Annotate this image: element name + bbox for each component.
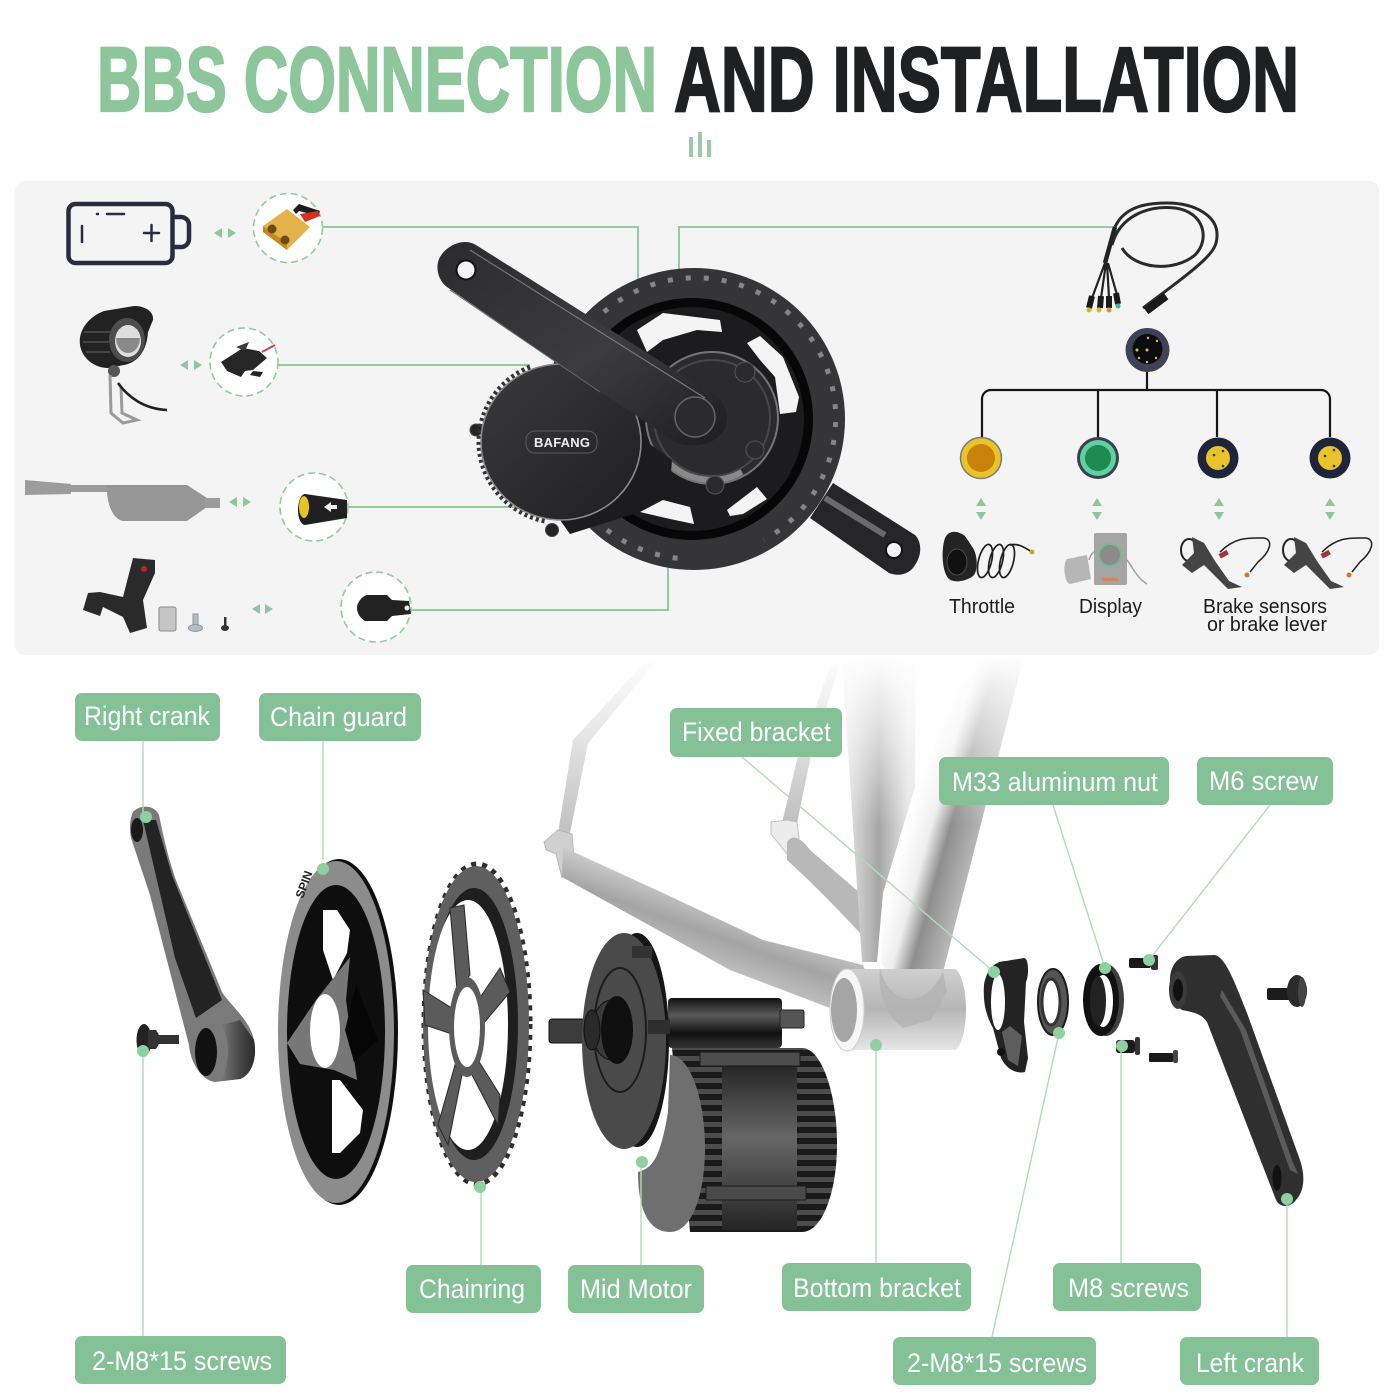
- title: [97, 29, 1299, 131]
- plug: brake 1: [1198, 438, 1238, 478]
- motor assembly photo: [437, 242, 920, 575]
- badge: Right crank: Right crank: [84, 701, 210, 731]
- label: Brake sensors: Brake sensors: [1203, 596, 1327, 618]
- plug: throttle: [960, 438, 1002, 478]
- badge: 2-M8*15 screws right: 2-M8*15 screws: [907, 1348, 1087, 1378]
- leader lines: [143, 741, 1287, 1337]
- motor cover: [479, 364, 641, 521]
- label: Throttle: Throttle: [949, 596, 1015, 618]
- badge: M33 aluminum nut: M33 aluminum nut: [952, 767, 1158, 797]
- arrows: battery: [214, 228, 236, 238]
- connector: light: [210, 328, 278, 396]
- dropout right: [771, 820, 799, 854]
- badge: Chain guard: Chain guard: [270, 702, 407, 732]
- title ornament: [689, 132, 711, 157]
- connector tree: [982, 372, 1330, 437]
- arrows: headlight: [180, 360, 202, 370]
- label: Display: Display: [1079, 596, 1142, 618]
- screw mid: [1116, 1037, 1140, 1055]
- logo: BAFANG: [534, 435, 590, 450]
- icon: battery: [68, 204, 189, 263]
- badge: Bottom bracket: [782, 1263, 971, 1311]
- chain guard part: SPIN: [293, 869, 315, 900]
- badge: M6 screw: [1197, 757, 1333, 805]
- icon: speed sensor bracket: [83, 558, 229, 633]
- motor body: [638, 1048, 837, 1232]
- main connector: [1126, 328, 1170, 372]
- connection lines: [278, 227, 1113, 610]
- badge: M8 screws: [1053, 1263, 1201, 1311]
- bottom bracket shell: [830, 968, 966, 1051]
- right crank part: [130, 807, 255, 1082]
- icon: display: [1064, 533, 1147, 585]
- marker dots: [137, 811, 1293, 1205]
- title: green part: BBS CONNECTION: [97, 29, 657, 131]
- icon: speed sensor cable: [25, 480, 220, 521]
- bike frame: [530, 656, 1050, 1051]
- plug: brake 2: [1310, 438, 1350, 478]
- badge: M33 aluminum nut: [939, 757, 1169, 805]
- badge: Fixed bracket: Fixed bracket: [682, 717, 831, 747]
- screw lower: [1149, 1050, 1178, 1063]
- shaft left: [549, 1019, 585, 1043]
- chainring part: [423, 864, 530, 1184]
- badge: M8 screws: M8 screws: [1068, 1273, 1189, 1303]
- icon: throttle: [943, 532, 1034, 581]
- fixed bracket part: [984, 958, 1028, 1072]
- badge: Chainring: Chainring: [419, 1274, 525, 1304]
- dropout left: [544, 830, 574, 878]
- badge: 2-M8*15 screws right: [893, 1337, 1096, 1385]
- lug bolts: [470, 424, 558, 536]
- crank bolt right: [1267, 975, 1307, 1007]
- badge: 2-M8*15 screws left: [75, 1336, 286, 1384]
- seat tube: [842, 660, 915, 962]
- nut part: [1038, 969, 1068, 1035]
- badge: Chainring: [406, 1265, 541, 1313]
- cylinder housing: [668, 998, 782, 1048]
- badge: Chain guard: [259, 693, 421, 741]
- down tube: [880, 660, 1023, 981]
- seat stay lower: [787, 838, 860, 933]
- mid motor part: [549, 933, 837, 1232]
- mounting disc: [582, 933, 670, 1149]
- badge: Mid Motor: [568, 1265, 704, 1313]
- chainstay: [562, 847, 867, 1010]
- badge: M6 screw: M6 screw: [1209, 766, 1318, 796]
- badge: Left crank: Left crank: [1196, 1348, 1304, 1378]
- label: or brake lever: or brake lever: [1207, 614, 1327, 636]
- connector: bracket: [341, 572, 411, 642]
- rear stay right: [782, 663, 840, 823]
- wiring harness: [1086, 203, 1217, 312]
- badge: Left crank: [1180, 1337, 1319, 1385]
- chain guard part: [278, 859, 398, 1205]
- arrows: sensor: [229, 497, 251, 507]
- crank bolt left: [136, 1024, 179, 1056]
- badge: 2-M8*15 screws left: 2-M8*15 screws: [92, 1346, 272, 1376]
- M33 cup part: [1083, 964, 1124, 1036]
- badge: Bottom bracket: Bottom bracket: [793, 1273, 961, 1303]
- frame fade: [530, 656, 1050, 826]
- gearbox link: [560, 430, 672, 534]
- panel: connection diagram: [15, 181, 1379, 655]
- arrows: bracket: [252, 604, 273, 614]
- right crank arm: [437, 242, 727, 445]
- connector: sensor: [280, 473, 348, 541]
- screw top: [1129, 955, 1158, 970]
- left crank part: [1169, 955, 1303, 1206]
- left crank arm: [810, 483, 920, 575]
- spider windows: [637, 313, 799, 524]
- shaft right: [780, 1010, 804, 1028]
- badge: Fixed bracket: [670, 708, 842, 757]
- icon: headlight: [80, 306, 167, 423]
- badge: Right crank: [75, 693, 220, 741]
- badge: Mid Motor: Mid Motor: [580, 1274, 692, 1304]
- icon: brake lever 1: [1181, 537, 1270, 589]
- plug: display: [1077, 437, 1119, 479]
- rear stay left: [558, 660, 657, 833]
- chain guard ring: [543, 268, 845, 570]
- connector: XT60: [254, 194, 322, 262]
- icon: brake lever 2: [1283, 537, 1372, 589]
- motor disk: [646, 352, 778, 494]
- arrows: vertical: [976, 498, 1335, 520]
